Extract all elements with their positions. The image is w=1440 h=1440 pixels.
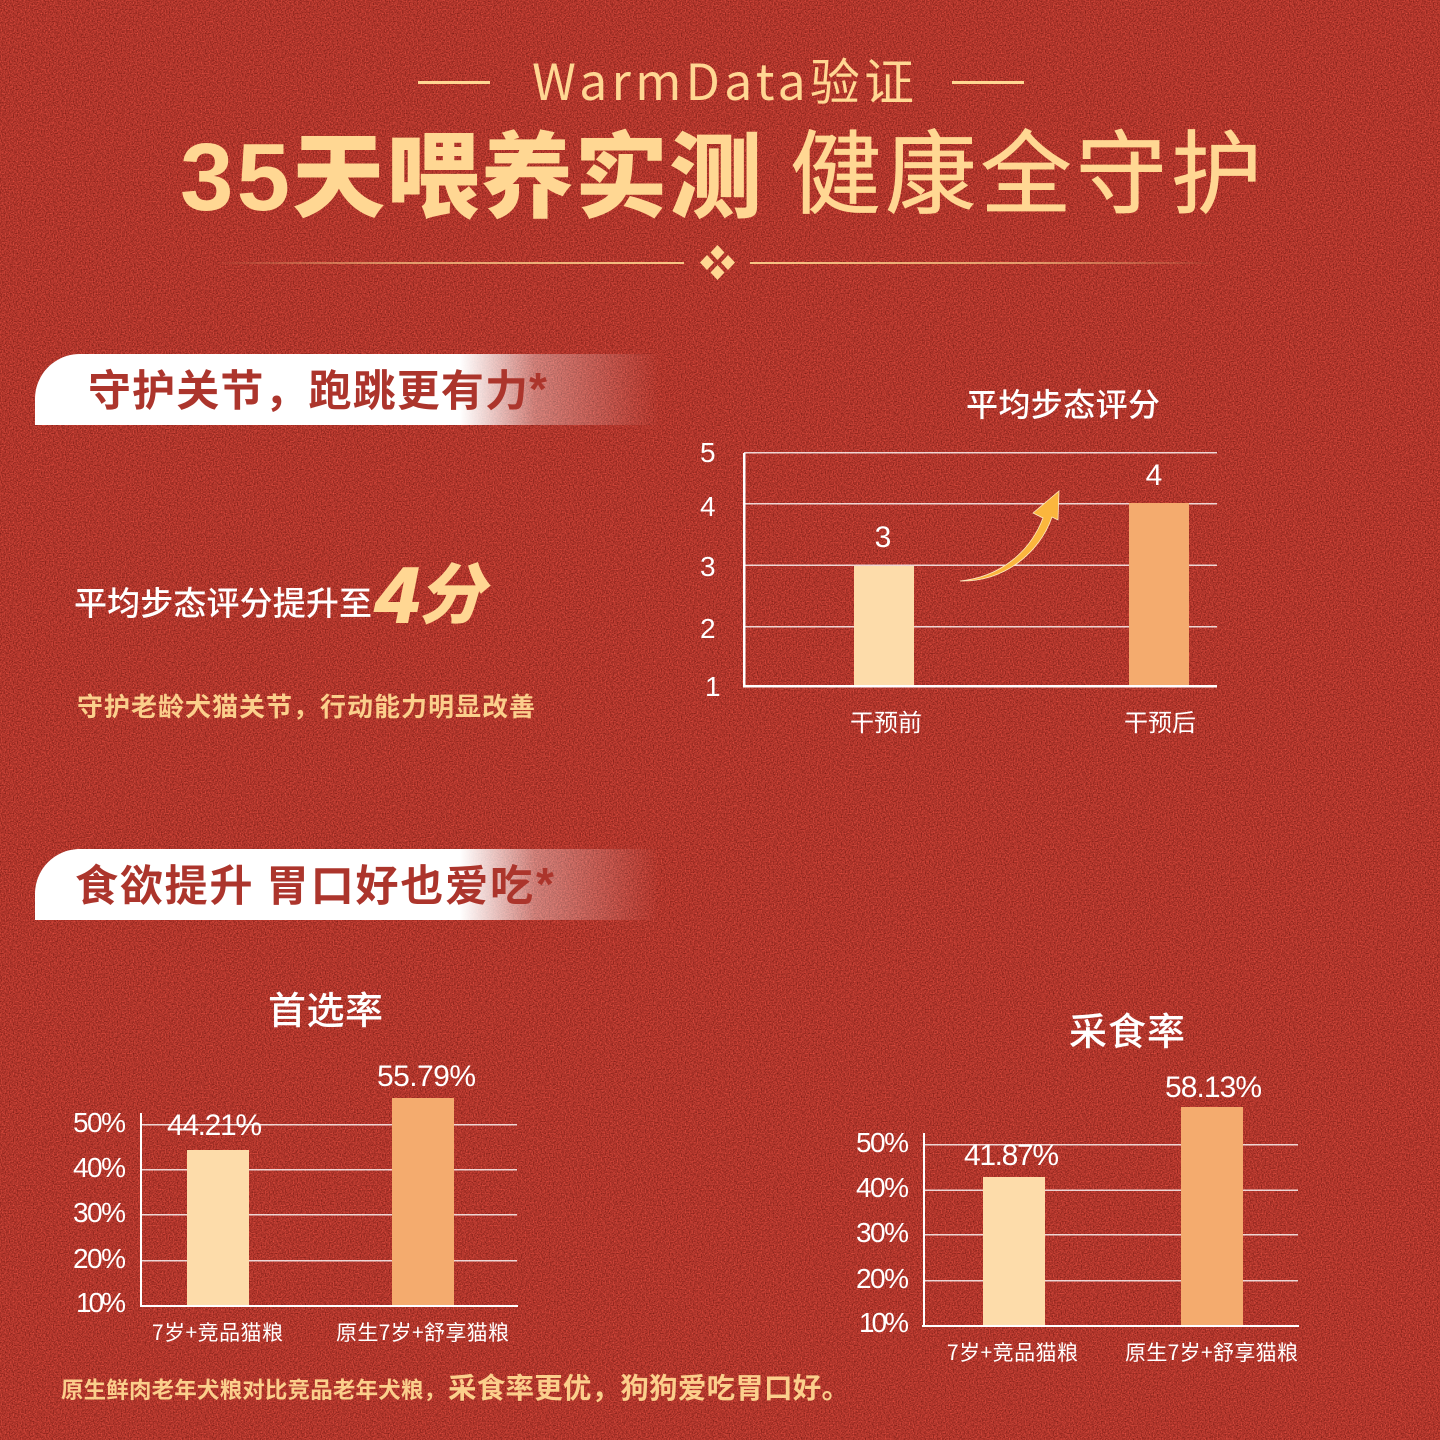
bar chart: preference rate: 10%: [76, 1287, 126, 1318]
bar chart: intake rate: 10%: [859, 1307, 909, 1338]
bar chart: average gait score: 3: [700, 551, 716, 582]
bar chart: preference rate: 40%: [73, 1152, 126, 1183]
eyebrow heading: WarmData验证: WarmData验证: [532, 43, 914, 115]
panel: appetite section banner: *: [536, 858, 554, 910]
arrow: upward trend: [960, 491, 1059, 581]
text block: footnote: 原生鲜肉老年犬粮对比竞品老年犬粮，: [61, 1373, 446, 1405]
title: 35: [180, 124, 290, 231]
bar chart: preference rate: 50%: [73, 1107, 126, 1138]
bar chart: average gait score: 4: [700, 491, 716, 522]
bar chart: preference rate: [73, 1060, 518, 1347]
title divider with diamonds: [215, 245, 1220, 280]
bar chart: preference rate: 原生7岁+舒享猫粮: [336, 1317, 509, 1347]
text block: joint benefit: 守护老龄犬猫关节，行动能力明显改善: [77, 687, 535, 724]
callout: gait score increased to 4: 分: [418, 542, 491, 638]
bar chart: average gait score: 4: [1146, 459, 1162, 492]
bar chart: intake rate: [856, 1071, 1299, 1367]
bar chart: preference rate: 44.21%: [167, 1109, 262, 1142]
callout: gait score increased to 4: [74, 542, 491, 639]
bar chart: intake rate: 30%: [856, 1217, 909, 1248]
text block: footnote: [61, 1366, 850, 1407]
panel: appetite section banner: [35, 849, 660, 920]
bar chart: average gait score: 干预后: [1124, 703, 1196, 738]
eyebrow heading: WarmData验证: [418, 43, 1024, 115]
title: 天喂养实测: [292, 102, 762, 237]
heading: preference rate: 首选率: [268, 980, 383, 1035]
bar chart: intake rate: 7岁+竞品猫粮: [947, 1337, 1078, 1367]
bar chart: preference rate: 55.79%: [377, 1060, 476, 1093]
bar chart: intake rate: 41.87%: [964, 1139, 1059, 1172]
bar chart: intake rate: 原生7岁+舒享猫粮: [1125, 1337, 1298, 1367]
title: 健康全守护: [790, 101, 1262, 233]
bar chart: average gait score: 干预前: [850, 703, 922, 738]
bar chart: average gait score: 3: [875, 521, 891, 554]
panel: joint section banner: [35, 354, 660, 425]
bar chart: preference rate: 7岁+竞品猫粮: [152, 1317, 283, 1347]
callout: gait score increased to 4: 平均步态评分提升至: [74, 577, 372, 625]
bar chart: average gait score: [700, 437, 1217, 738]
bar chart: intake rate: 58.13%: [1165, 1071, 1262, 1104]
heading: intake rate: 采食率: [1069, 1001, 1185, 1056]
bar chart: intake rate: 40%: [856, 1172, 909, 1203]
bar chart: average gait score: 5: [700, 437, 716, 468]
callout: gait score increased to 4: 4: [374, 551, 419, 639]
panel: joint section banner: 守护关节，跑跳更有力: [88, 357, 528, 419]
heading: gait chart title: 平均步态评分: [966, 380, 1160, 426]
bar chart: preference rate: 20%: [73, 1243, 126, 1274]
panel: joint section banner: *: [529, 363, 547, 415]
bar chart: preference rate: 30%: [73, 1197, 126, 1228]
title: [180, 101, 1262, 237]
panel: appetite section banner: 食欲提升 胃口好也爱吃: [75, 852, 533, 914]
bar chart: intake rate: 20%: [856, 1263, 909, 1294]
text block: footnote: 采食率更优，狗狗爱吃胃口好。: [448, 1366, 850, 1407]
bar chart: average gait score: 1: [705, 671, 721, 702]
bar chart: average gait score: 2: [700, 613, 716, 644]
bar chart: intake rate: 50%: [856, 1127, 909, 1158]
